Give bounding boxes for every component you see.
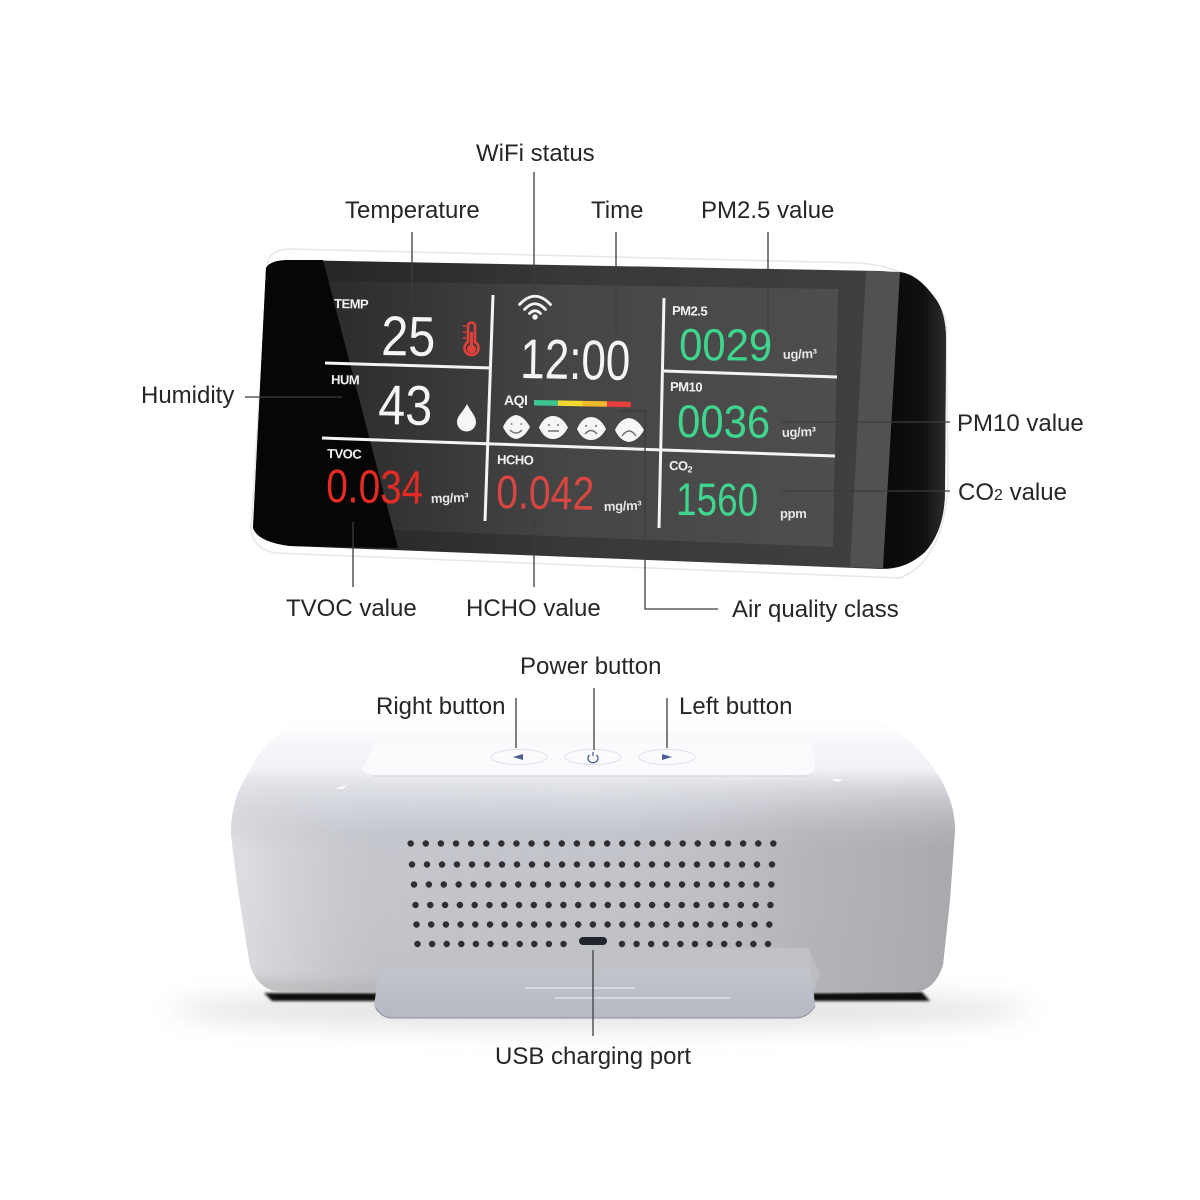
top inset panel (362, 741, 815, 775)
AQI colour bar (534, 400, 631, 407)
panel: TVOC: 0.034 (326, 459, 424, 514)
time: 12:00 (520, 327, 631, 392)
panel: HCHO (496, 452, 643, 520)
right button (491, 750, 547, 764)
rear view of monitor (186, 742, 1014, 1036)
panel: HCHO: HCHO (497, 452, 534, 468)
panel: WiFi, time, AQI (503, 296, 644, 442)
callout labels: Left button (679, 693, 792, 720)
shoulder glints (335, 779, 843, 789)
callout labels: Air quality class (732, 596, 899, 623)
panel: temperature: TEMP (334, 296, 369, 312)
panel: humidity (331, 372, 476, 437)
stand fold right (809, 948, 820, 992)
icon: thermometer (463, 322, 479, 355)
panel: PM2.5 (672, 303, 818, 371)
callout labels: Right button (376, 693, 505, 720)
front view of monitor (251, 249, 948, 578)
panel: humidity: 43 (378, 373, 433, 437)
AQI label: AQI (504, 392, 527, 408)
callout lines (245, 172, 950, 1036)
stand plate (374, 948, 815, 1018)
panel: HCHO: mg/m³ (604, 498, 643, 514)
panel: PM10: PM10 (670, 379, 702, 395)
callout labels: PM10 value (957, 410, 1084, 437)
panel: CO2: CO (669, 458, 688, 473)
callout labels: CO2 value (958, 479, 1067, 506)
screen divider lines (322, 295, 837, 528)
panel: humidity: HUM (331, 372, 359, 387)
panel: CO2: 1560 (676, 473, 758, 526)
stand edge shadow (376, 1006, 815, 1018)
panel front edge shade (372, 775, 808, 777)
black reflection left (253, 260, 398, 548)
panel: PM10: 0036 (677, 395, 770, 448)
ground shadow (170, 990, 1030, 1030)
callout labels: Humidity (141, 382, 234, 409)
panel: TVOC: mg/m³ (431, 490, 470, 506)
icon: wifi (520, 296, 550, 320)
panel: CO2: 2 (687, 464, 693, 474)
panel: PM2.5: 0029 (679, 319, 772, 371)
lower corner shading (254, 974, 376, 992)
plate highlights (525, 988, 730, 998)
panel: HCHO: 0.042 (496, 465, 595, 520)
screen panel (319, 281, 838, 547)
panel: PM10 (670, 379, 817, 448)
panel: temperature (334, 296, 479, 368)
right lighter strip (850, 271, 900, 568)
icon: water drop (457, 404, 476, 432)
callout labels: PM2.5 value (701, 197, 834, 224)
panel: temperature: 25 (381, 304, 436, 368)
icon: faces (503, 415, 644, 442)
speaker grille (411, 844, 774, 944)
callout labels: TVOC value (286, 595, 417, 622)
panel: TVOC (326, 446, 470, 514)
panel: PM10: ug/m³ (782, 424, 817, 440)
panel: CO2: ppm (780, 506, 807, 521)
device outer highlight rim (251, 249, 948, 578)
callout labels: Time (591, 197, 643, 224)
power button (565, 750, 621, 764)
right black edge (883, 272, 946, 568)
panel: TVOC: TVOC (327, 446, 362, 462)
contact shadows (264, 992, 930, 1001)
callout labels (141, 140, 1084, 1070)
body shell (231, 742, 955, 992)
callout labels: WiFi status (476, 140, 595, 167)
callout labels: Power button (520, 653, 661, 680)
USB port (579, 937, 607, 945)
panel: PM2.5: ug/m³ (783, 346, 818, 362)
callout labels: HCHO value (466, 595, 601, 622)
top edge fade to white (225, 715, 960, 745)
left button (639, 750, 695, 764)
callout labels: Temperature (345, 197, 480, 224)
callout labels: USB charging port (495, 1043, 691, 1070)
device body (253, 260, 946, 569)
panel: PM2.5: PM2.5 (672, 303, 708, 319)
panel: CO2 (669, 458, 807, 526)
